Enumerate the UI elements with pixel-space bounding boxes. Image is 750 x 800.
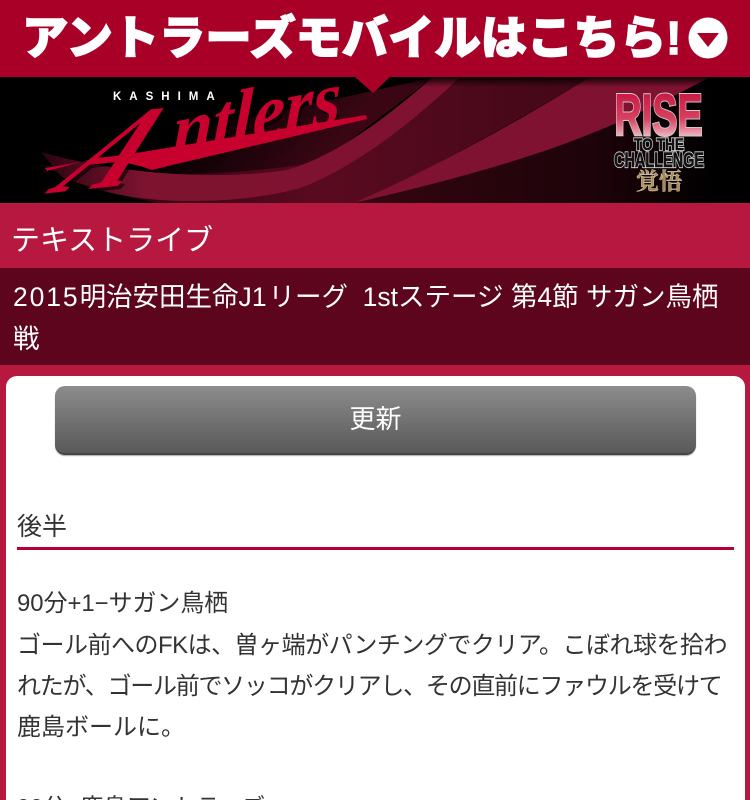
logo: RISE TO THE CHALLENGE: CHALLENGE — [614, 149, 704, 172]
logo: RISE TO THE CHALLENGE: 覚悟 — [636, 169, 682, 194]
top banner link — [0, 0, 750, 77]
logo: KASHIMA: KASHIMA — [113, 91, 223, 103]
half heading: 後半 — [17, 513, 67, 541]
match title text — [13, 282, 718, 354]
logo: RISE TO THE CHALLENGE: RISE — [614, 83, 702, 148]
section heading: text live — [0, 203, 750, 268]
commentary entry 1: れたが、ゴール前でソッコがクリアし、その直前にファウルを受けて — [17, 673, 721, 700]
section title text: テキストライブ — [11, 225, 213, 257]
logo: RISE TO THE CHALLENGE: TO THE — [634, 135, 684, 154]
button label: 更新 — [349, 404, 402, 434]
update button — [55, 386, 696, 455]
commentary entry 1: ゴール前へのFKは、曽ヶ端がパンチングでクリア。こぼれ球を拾わ — [17, 632, 727, 659]
commentary entry 1: 90分+1−サガン鳥栖 — [17, 590, 228, 617]
background swooshes — [40, 77, 720, 203]
logo: RISE TO THE CHALLENGE — [614, 83, 704, 194]
commentary entry 1 — [17, 590, 727, 741]
half heading — [17, 510, 734, 550]
logo: RISE TO THE CHALLENGE: RISE — [614, 83, 702, 148]
match title text: 2015明治安田生命J1リーグ 1stステージ 第4節 サガン鳥栖 — [13, 282, 718, 312]
pointer notch — [355, 77, 390, 93]
match title text: 戦 — [13, 324, 40, 354]
match title bar — [0, 268, 750, 365]
logo: Antlers script — [23, 52, 367, 224]
banner heading: アントラーズモバイルはこちら! — [22, 12, 681, 64]
content card — [6, 376, 745, 800]
commentary entry 1: 鹿島ボールに。 — [17, 714, 185, 741]
icon: down arrow circle — [688, 18, 728, 58]
logo: RISE TO THE CHALLENGE: TO THE — [634, 135, 684, 154]
logo: RISE TO THE CHALLENGE: CHALLENGE — [614, 149, 704, 172]
header image: Kashima Antlers — [0, 77, 750, 203]
